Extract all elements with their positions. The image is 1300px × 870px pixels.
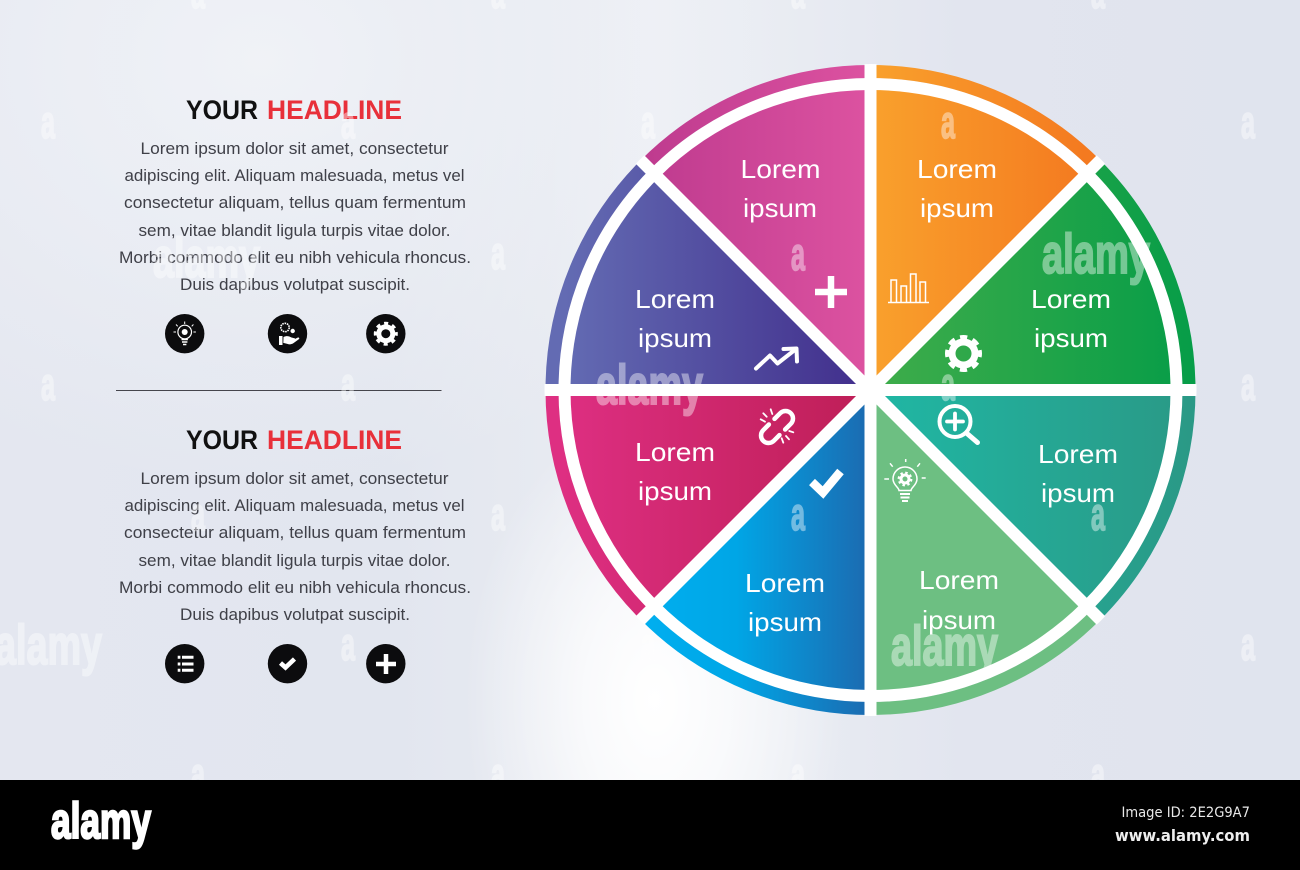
text block: top paragraph: consectetur aliquam, tellus quam fermentum: [124, 194, 466, 212]
text block: bottom paragraph: sem, vitae blandit ligula turpis vitae dolor.: [138, 552, 450, 570]
panel: bottom text block: [119, 425, 471, 683]
text block: top paragraph: adipiscing elit. Aliquam malesuada, metus vel: [124, 167, 464, 185]
icon: gear: [948, 338, 980, 370]
label: green segment: [1031, 284, 1111, 353]
watermark: repeated alamy marks: a: [341, 96, 355, 148]
label: green segment: ipsum: [1034, 323, 1108, 353]
icon: bar chart: [888, 274, 929, 302]
icon: plus: [815, 276, 847, 308]
divider: [116, 390, 442, 391]
text block: top paragraph: Morbi commodo elit eu nibh vehicula rhoncus.: [119, 249, 471, 267]
icon: check mark: [812, 472, 840, 492]
icon: check badge: [268, 644, 307, 683]
watermark: repeated alamy marks: a: [341, 618, 355, 670]
text block: bottom paragraph: [119, 470, 471, 624]
text block: bottom paragraph: Lorem ipsum dolor sit amet, consectetur: [140, 470, 449, 488]
label: magenta segment: Lorem: [740, 154, 820, 184]
segment: magenta: [645, 72, 870, 390]
watermark: repeated alamy marks: a: [941, 96, 955, 148]
label: crimson segment: Lorem: [635, 437, 715, 467]
watermark: repeated alamy marks: a: [491, 488, 505, 540]
label: crimson segment: ipsum: [638, 476, 712, 506]
text block: top paragraph: Lorem ipsum dolor sit amet, consectetur: [140, 140, 449, 158]
footer bar: [0, 780, 1300, 870]
watermark: repeated alamy marks: a: [41, 358, 55, 410]
panel: top text block: [119, 95, 471, 353]
watermark: repeated alamy marks: a: [41, 96, 55, 148]
label: orange segment: Lorem: [917, 154, 997, 184]
footer image id: Image ID: 2E2G9A7: [1122, 805, 1250, 821]
icon: plus badge: [366, 644, 405, 683]
icon: gear badge: [366, 314, 405, 353]
text block: bottom paragraph: consectetur aliquam, tellus quam fermentum: [124, 524, 466, 542]
footer logo: alamy: [51, 793, 151, 849]
text block: top paragraph: sem, vitae blandit ligula turpis vitae dolor.: [138, 222, 450, 240]
label: teal segment: [1038, 439, 1118, 508]
white center hub: [858, 377, 884, 403]
watermark: repeated alamy marks: a: [191, 748, 205, 800]
label: indigo segment: ipsum: [638, 323, 712, 353]
icon: list badge: [165, 644, 204, 683]
watermark: repeated alamy marks: alamy: [1042, 222, 1150, 285]
label: indigo segment: [635, 284, 715, 353]
heading: top headline: [186, 95, 402, 125]
watermark: repeated alamy marks: a: [491, 227, 505, 279]
label: blue segment: ipsum: [748, 607, 822, 637]
watermark: repeated alamy marks: a: [641, 96, 655, 148]
label: magenta segment: [740, 154, 820, 223]
icon: magnifier: [940, 406, 978, 442]
text block: bottom paragraph: Morbi commodo elit eu nibh vehicula rhoncus.: [119, 579, 471, 597]
heading: bottom headline: [186, 425, 402, 455]
label: magenta segment: ipsum: [743, 193, 817, 223]
watermark: repeated alamy marks: a: [791, 748, 805, 800]
segment: teal: [870, 390, 1189, 615]
label: green segment: Lorem: [1031, 284, 1111, 314]
icon: lightbulb with gear: [884, 459, 926, 501]
watermark: repeated alamy marks: a: [1091, 488, 1105, 540]
label: orange segment: [917, 154, 997, 223]
watermark: repeated alamy marks: a: [791, 488, 805, 540]
label: light green segment: ipsum: [922, 605, 996, 635]
white separators: [530, 50, 1210, 730]
watermark: repeated alamy marks: a: [1241, 618, 1255, 670]
label: teal segment: ipsum: [1041, 478, 1115, 508]
segment: orange: [870, 72, 1096, 390]
label: crimson segment: [635, 437, 715, 506]
watermark: repeated alamy marks: alamy: [153, 226, 260, 289]
segment: indigo: [552, 165, 870, 390]
segment: light green: [870, 390, 1096, 708]
label: blue segment: Lorem: [745, 568, 825, 598]
chart: eight-segment pie wheel: [530, 50, 1210, 730]
watermark: repeated alamy marks: a: [641, 618, 655, 670]
segment: crimson: [552, 390, 870, 615]
segment: green: [870, 165, 1189, 390]
label: indigo segment: Lorem: [635, 284, 715, 314]
text block: top paragraph: Duis dapibus volutpat suscipit.: [180, 276, 410, 294]
icon: broken link: [758, 408, 796, 446]
watermark: repeated alamy marks: a: [791, 228, 805, 280]
watermark: repeated alamy marks: a: [1241, 96, 1255, 148]
watermark: repeated alamy marks: alamy: [891, 614, 998, 677]
footer website: www.alamy.com: [1115, 826, 1250, 845]
heading: top headline: HEADLINE: [267, 95, 402, 125]
label: orange segment: ipsum: [920, 193, 994, 223]
heading: bottom headline: HEADLINE: [267, 425, 402, 455]
text block: bottom paragraph: adipiscing elit. Aliquam malesuada, metus vel: [124, 497, 464, 515]
watermark: repeated alamy marks: a: [941, 358, 955, 410]
watermark: repeated alamy marks: a: [341, 358, 355, 410]
watermark: repeated alamy marks: a: [1091, 748, 1105, 800]
watermark: repeated alamy marks: a: [191, 488, 205, 540]
text block: bottom paragraph: Duis dapibus volutpat suscipit.: [180, 606, 410, 624]
disc base: [558, 78, 1182, 702]
text block: top paragraph: [119, 140, 471, 294]
watermark: repeated alamy marks: alamy: [596, 353, 703, 416]
label: teal segment: Lorem: [1038, 439, 1118, 469]
label: light green segment: [919, 565, 999, 635]
heading: top headline: YOUR: [186, 95, 258, 125]
watermark: repeated alamy marks: a: [1241, 358, 1255, 410]
icon: trend arrow: [756, 348, 797, 368]
heading: bottom headline: YOUR: [186, 425, 258, 455]
icon: lightbulb badge: [165, 314, 204, 353]
segment: blue: [645, 390, 870, 708]
watermark: repeated alamy marks: a: [491, 748, 505, 800]
label: blue segment: [745, 568, 825, 637]
label: light green segment: Lorem: [919, 565, 999, 595]
icon: hand with gears badge: [268, 314, 307, 353]
